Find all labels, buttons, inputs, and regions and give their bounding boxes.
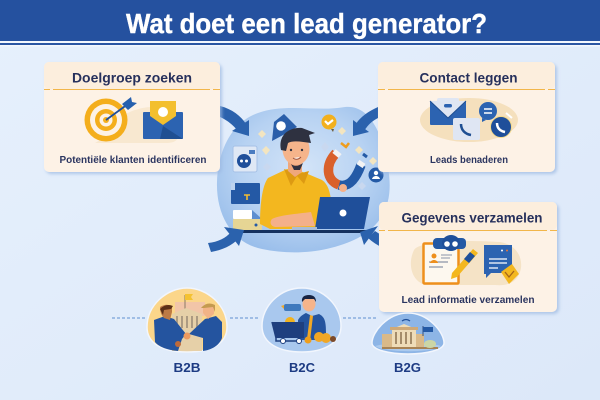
label: B2C bbox=[289, 360, 316, 375]
icon: magnet bbox=[328, 143, 367, 192]
icon: government building with flag bbox=[372, 313, 444, 354]
dotted connector line bbox=[112, 317, 378, 319]
header banner bbox=[0, 0, 600, 46]
laptop bbox=[233, 197, 370, 233]
caption: Leads benaderen bbox=[430, 154, 508, 166]
person: hair bbox=[280, 128, 315, 151]
heading: Gegevens verzamelen bbox=[402, 210, 542, 226]
person: shirt bbox=[260, 169, 331, 229]
title: Wat doet een lead generator? bbox=[126, 8, 487, 39]
B2C segment bbox=[262, 288, 341, 375]
background blob bbox=[217, 107, 390, 252]
icon: profile bubble bbox=[368, 168, 384, 182]
panel: Doelgroep zoeken bbox=[44, 62, 220, 172]
icon: chat window bbox=[233, 146, 257, 172]
arrow: card 3 to centre bbox=[360, 226, 395, 251]
icon: target with arrow bbox=[84, 97, 178, 143]
caption: Lead informatie verzamelen bbox=[402, 294, 534, 306]
divider bbox=[379, 230, 557, 232]
decorative sparkles bbox=[258, 127, 377, 190]
icon: printer bbox=[233, 210, 262, 230]
person: neck bbox=[288, 160, 302, 177]
person: collar and shirt details bbox=[284, 169, 309, 186]
icon: envelope with tag bbox=[143, 101, 183, 139]
person: head bbox=[282, 133, 310, 165]
central illustration: person at laptop bbox=[217, 107, 390, 252]
arrow: card 2 to centre bbox=[353, 107, 378, 136]
panel: Contact leggen bbox=[378, 62, 555, 172]
icon: form, pencil and document bbox=[411, 235, 521, 285]
icon: location bubble bbox=[272, 114, 297, 141]
icon: handshake in front of building bbox=[147, 288, 227, 352]
icon: check bubble bbox=[322, 114, 336, 132]
label: B2B bbox=[174, 360, 200, 375]
heading: Doelgroep zoeken bbox=[72, 70, 192, 86]
icon: envelope and phones bbox=[420, 98, 518, 142]
label: B2G bbox=[394, 360, 421, 375]
caption: Potentiële klanten identificeren bbox=[60, 154, 206, 166]
heading: Contact leggen bbox=[420, 70, 518, 86]
B2G segment bbox=[372, 313, 444, 375]
B2B segment bbox=[147, 288, 227, 375]
icon: businessman with shopping cart bbox=[262, 288, 341, 352]
person: beard and face bbox=[290, 149, 303, 170]
divider bbox=[378, 88, 555, 90]
person: arm bbox=[271, 212, 315, 227]
divider bbox=[44, 88, 220, 90]
icon: blue folder bbox=[231, 183, 260, 204]
arrow: card 1 to centre bbox=[220, 106, 249, 136]
arrow: bottom-left to centre bbox=[208, 227, 244, 252]
panel: Gegevens verzamelen bbox=[379, 202, 557, 312]
